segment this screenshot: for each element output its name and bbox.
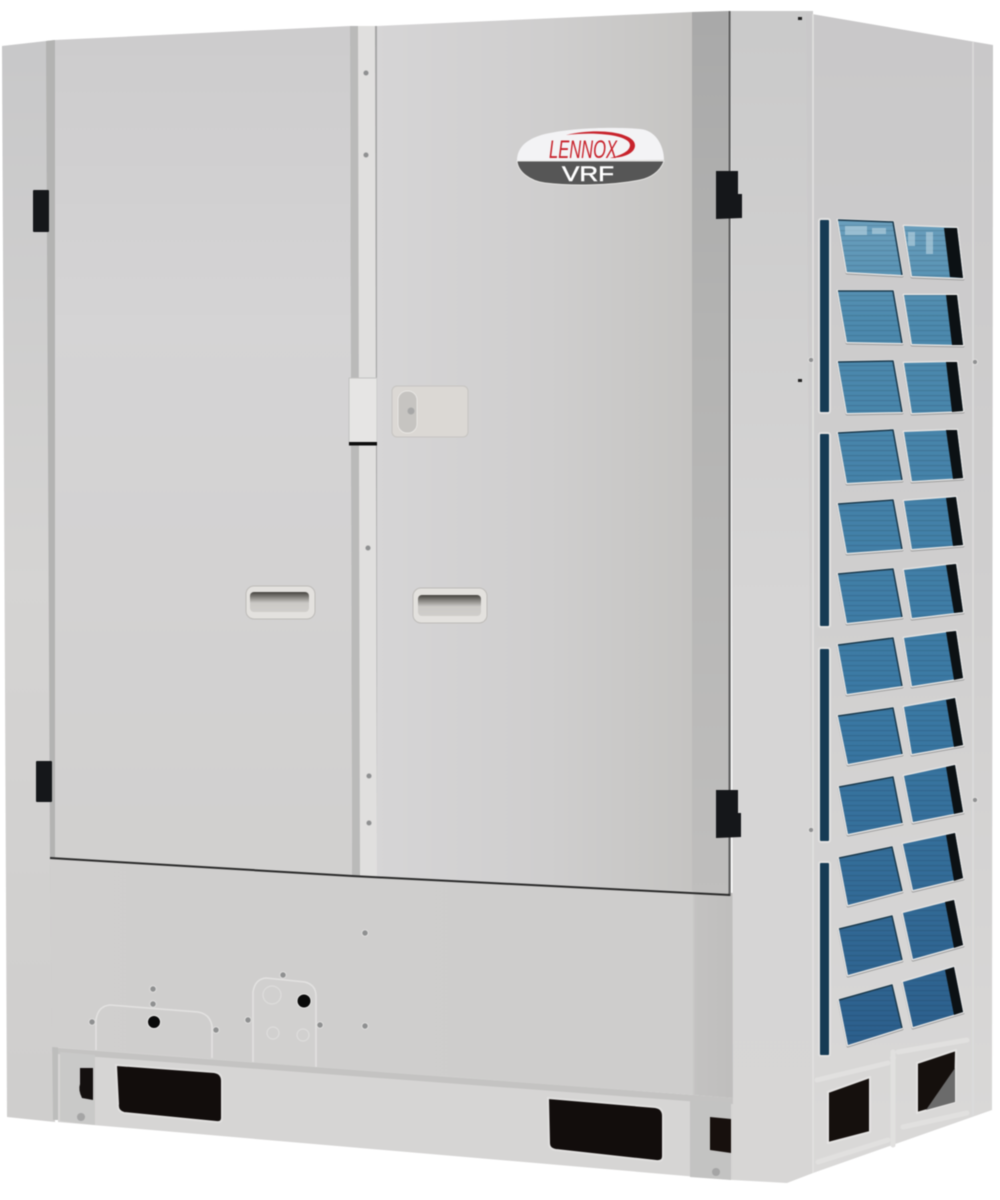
panel: left door (55, 26, 352, 876)
hole right (297, 994, 311, 1008)
hinge: lower left (36, 761, 52, 802)
panel: left side column (2, 40, 60, 1122)
slot: right small (710, 1117, 731, 1153)
hole left (148, 1016, 160, 1028)
marks (798, 17, 802, 382)
access panel (392, 386, 468, 437)
slot: centre (548, 1098, 663, 1161)
swoosh (566, 131, 635, 158)
shaded door return (692, 11, 728, 895)
bolt left (77, 1113, 85, 1121)
panel: lower front cover (50, 858, 733, 1098)
vent: left (828, 1077, 870, 1143)
screws (808, 357, 978, 1061)
slot: left small (79, 1068, 93, 1100)
left bracket recess (60, 1052, 95, 1125)
coil reflections: top row (845, 226, 933, 254)
logo: Lennox VRF badge (517, 128, 664, 186)
seam: door bottom (50, 858, 730, 895)
screws (89, 930, 368, 1033)
bolt right (712, 1168, 720, 1176)
coil shade: left window inner edges (838, 220, 902, 1028)
panel: base with air slots (58, 1046, 733, 1180)
hinge: upper right (716, 171, 742, 219)
latch (349, 378, 377, 446)
handle: left door (246, 586, 315, 619)
panel: right door (246, 11, 730, 896)
slot: left (116, 1065, 222, 1122)
hinge: upper left (33, 190, 49, 232)
knockouts (263, 986, 309, 1041)
coil fin texture (838, 225, 953, 1041)
coil grille: right column windows (903, 226, 963, 1027)
panel: corner column (731, 11, 813, 1183)
vent strips: narrow coil slots (819, 219, 830, 1056)
right recess (690, 1100, 731, 1180)
wordmark: LENNOX (549, 136, 618, 164)
coil shadow wedges (944, 228, 963, 1015)
plate: right knockout (253, 978, 316, 1067)
vent reflection (926, 1068, 955, 1110)
panel: side wall (798, 13, 993, 1173)
ridges (817, 1040, 967, 1162)
door edge (728, 11, 731, 896)
coil grille: left column windows (838, 220, 902, 1045)
product mark: VRF (562, 163, 614, 186)
screws (363, 70, 372, 826)
panel: centre column (349, 26, 379, 878)
hinge: lower right (716, 790, 741, 838)
handle: right door (413, 588, 487, 623)
vent: right (917, 1050, 956, 1113)
side base: lower vents and ridges (817, 1040, 967, 1162)
plate: left knockout (96, 1005, 212, 1058)
